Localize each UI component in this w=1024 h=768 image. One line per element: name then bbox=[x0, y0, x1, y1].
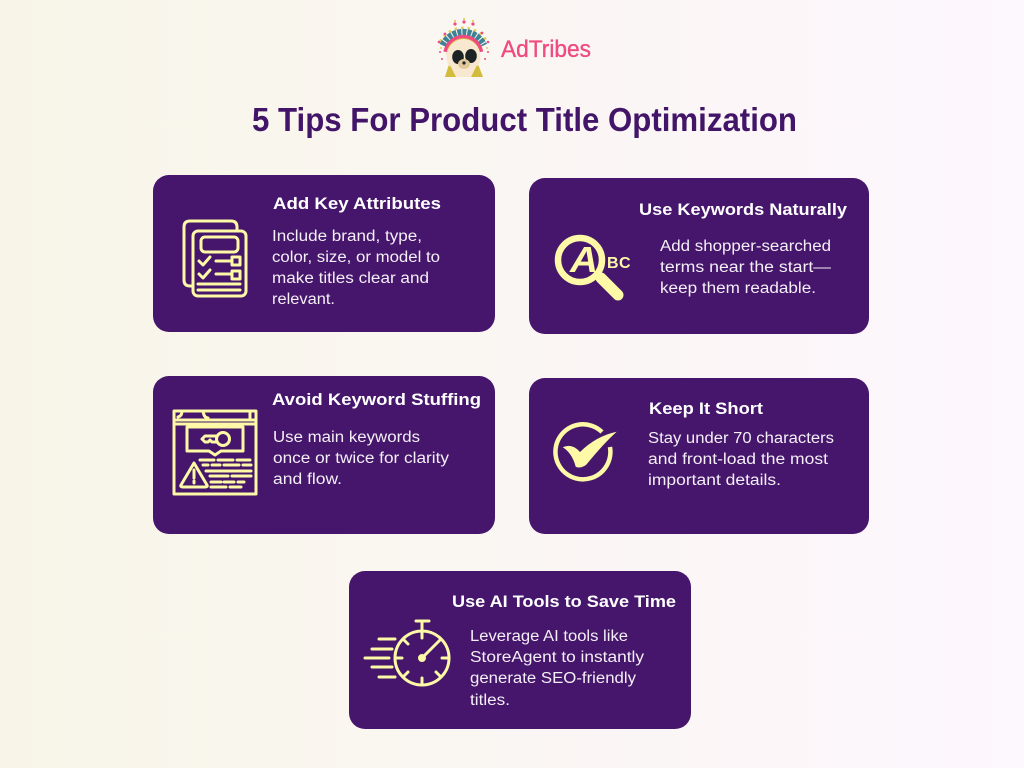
icon: checklist documents bbox=[184, 221, 246, 296]
body text bbox=[470, 628, 644, 709]
body text: Use main keywords bbox=[273, 429, 420, 446]
panel: Keep It Short bbox=[529, 378, 869, 534]
heading: Avoid Keyword Stuffing bbox=[272, 390, 481, 409]
panel: Add Key Attributes bbox=[153, 175, 495, 332]
body text: once or twice for clarity bbox=[273, 450, 449, 467]
panel: Use AI Tools to Save Time bbox=[349, 571, 691, 729]
icon: panda with headdress bbox=[438, 18, 489, 77]
heading: Keep It Short bbox=[649, 399, 763, 418]
panel: Avoid Keyword Stuffing bbox=[153, 376, 495, 534]
icon: magnifying glass with ABC: BC bbox=[607, 255, 631, 272]
icon: check mark in circle bbox=[555, 424, 617, 479]
heading: Use AI Tools to Save Time bbox=[452, 592, 676, 611]
body text: and front-load the most bbox=[648, 451, 829, 468]
title: 5 Tips For Product Title Optimization bbox=[252, 101, 797, 138]
panel: Use Keywords Naturally bbox=[529, 178, 869, 334]
icon: browser window with key and warning bbox=[174, 411, 256, 494]
body text: and flow. bbox=[273, 471, 342, 488]
body text: generate SEO-friendly bbox=[470, 670, 636, 687]
heading: Use Keywords Naturally bbox=[639, 200, 848, 219]
heading: Add Key Attributes bbox=[273, 194, 441, 213]
body text: Leverage AI tools like bbox=[470, 628, 628, 645]
body text: make titles clear and bbox=[272, 270, 429, 287]
body text: Include brand, type, bbox=[272, 228, 422, 245]
body text bbox=[660, 238, 832, 297]
icon: magnifying glass with ABC bbox=[558, 238, 631, 295]
body text bbox=[648, 430, 834, 489]
body text: StoreAgent to instantly bbox=[470, 649, 644, 666]
body text: Stay under 70 characters bbox=[648, 430, 834, 447]
body text: relevant. bbox=[272, 291, 335, 308]
body text: Add shopper-searched bbox=[660, 238, 831, 255]
icon: magnifying glass with ABC: A bbox=[569, 239, 598, 280]
body text bbox=[272, 228, 440, 308]
body text: color, size, or model to bbox=[272, 249, 440, 266]
icon: stopwatch with speed lines bbox=[365, 621, 449, 685]
logo: AdTribes bbox=[438, 18, 591, 77]
body text: keep them readable. bbox=[660, 280, 816, 297]
body text: important details. bbox=[648, 472, 781, 489]
body text: titles. bbox=[470, 692, 510, 709]
wordmark: AdTribes bbox=[501, 36, 591, 63]
body text: terms near the start— bbox=[660, 259, 832, 276]
body text bbox=[273, 429, 449, 488]
